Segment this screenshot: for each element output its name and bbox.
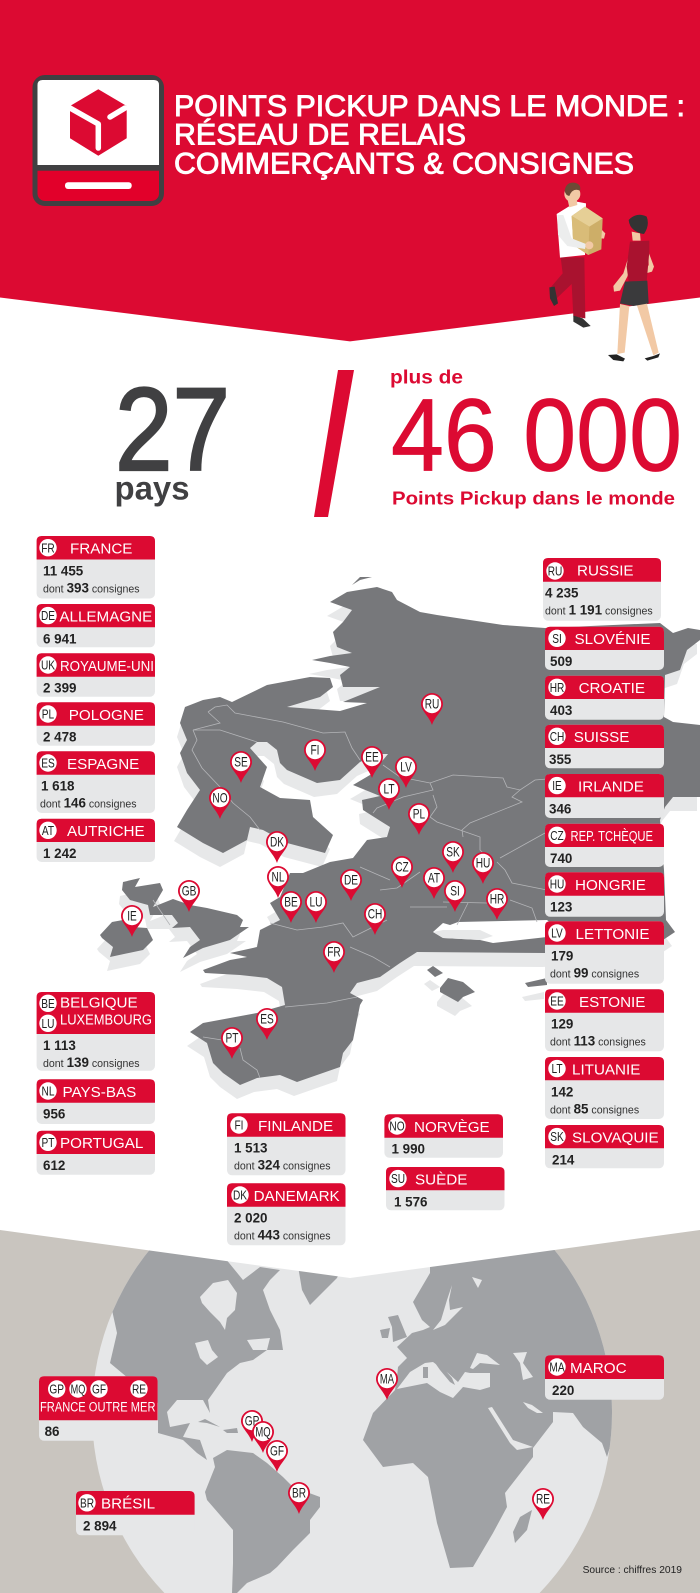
card: Portugal: PORTUGAL	[60, 1135, 143, 1152]
card: Allemagne	[37, 604, 155, 647]
card: Suisse	[545, 725, 664, 768]
card: France outre-mer: FRANCE OUTRE MER	[40, 1400, 156, 1415]
card: Finlande: FI	[234, 1118, 244, 1133]
land: North America	[110, 1250, 283, 1460]
card: Russie: dont 1 191 consignes	[545, 603, 653, 618]
card: Rép. Tchèque	[545, 824, 664, 867]
card: France: FR	[41, 541, 55, 556]
card: Lituanie: 142	[551, 1084, 573, 1099]
card: Royaume-Uni: 2 399	[43, 681, 77, 696]
card: Norvège: NO	[389, 1119, 405, 1134]
card: Norvège	[384, 1114, 503, 1158]
map pins: Europe: CH	[368, 906, 382, 922]
card: Espagne	[37, 751, 155, 813]
map pins: Europe: AT	[428, 870, 441, 886]
divider slash	[314, 370, 354, 517]
card: Finlande	[227, 1113, 346, 1175]
card: Russie: RU	[548, 564, 562, 579]
map pins: Europe: BE	[284, 894, 298, 910]
land: South America	[205, 1450, 320, 1593]
map pins: Europe: EE	[365, 749, 379, 765]
card: Russie	[543, 558, 661, 621]
map pins: Europe: RU	[425, 696, 439, 712]
card: Belgique Luxembourg: LU	[42, 1017, 54, 1031]
card: Pays-Bas: 956	[43, 1107, 65, 1122]
card: Russie: 4 235	[545, 586, 579, 601]
land: Madagascar	[513, 1510, 532, 1543]
card: Lituanie: LT	[551, 1062, 563, 1077]
map pins: Europe: LV	[400, 759, 412, 775]
card: Irlande: 346	[549, 801, 571, 816]
map pins: world: GF	[270, 1443, 284, 1459]
card: Rép. Tchèque: CZ	[550, 829, 564, 843]
card: Croatie: 403	[550, 703, 572, 718]
icon: DPD pickup locker logo	[35, 78, 162, 204]
stat: plus de 46 000 Points Pickup: plus de	[390, 368, 463, 389]
card: Lettonie: dont 99 consignes	[550, 966, 639, 981]
map pins: Europe: SE	[234, 754, 248, 770]
world section beige background	[0, 1225, 700, 1593]
map pins: Europe: NL	[272, 869, 285, 885]
card: Norvège: 1 990	[392, 1142, 425, 1157]
card: Slovénie	[545, 627, 664, 670]
map pins: Europe: PT	[226, 1030, 239, 1046]
title: POINTS PICKUP DANS LE MONDE :	[174, 90, 685, 123]
card: Lituanie	[545, 1057, 664, 1119]
card: Suède: 1 576	[394, 1194, 428, 1209]
card: Slovaquie	[545, 1125, 664, 1168]
map pins: Europe: DK	[270, 834, 284, 850]
card: Brésil: BRÉSIL	[101, 1496, 155, 1512]
card: Belgique Luxembourg: 1 113	[43, 1038, 76, 1053]
card: Finlande: FINLANDE	[258, 1118, 333, 1135]
card: Danemark: dont 443 consignes	[234, 1228, 331, 1243]
map pins: world: MA	[380, 1372, 394, 1387]
land: UK and Ireland	[380, 1315, 407, 1342]
red header band	[0, 0, 700, 341]
stat: plus de 46 000 Points Pickup: 46 000	[391, 378, 682, 493]
map pins: world: RE	[536, 1491, 550, 1507]
card: Rép. Tchèque: REP. TCHÈQUE	[570, 828, 653, 845]
card: France	[37, 536, 155, 598]
card: Pays-Bas: NL	[42, 1084, 55, 1099]
card: Pologne: PL	[42, 707, 55, 722]
map pins: Europe: IE	[127, 908, 137, 924]
card: Maroc: MA	[549, 1360, 565, 1375]
card: Suisse: CH	[550, 730, 564, 744]
card: France: FRANCE	[70, 540, 132, 558]
title	[174, 90, 685, 180]
card: Danemark: DK	[233, 1188, 247, 1203]
card: Portugal: PT	[42, 1136, 54, 1150]
card: Estonie: ESTONIE	[579, 994, 645, 1011]
map pins: Europe: CZ	[395, 859, 409, 875]
map pins: world: GP	[245, 1413, 259, 1429]
map pins: world: BR	[292, 1485, 306, 1501]
card: Autriche: 1 242	[43, 846, 77, 861]
card: Irlande: IE	[552, 779, 562, 794]
card: Allemagne: 6 941	[43, 631, 77, 646]
card: Allemagne: ALLEMAGNE	[59, 608, 152, 626]
map pins: Europe: FI	[310, 742, 320, 758]
map pins: Europe: LU	[310, 894, 322, 910]
map pins: Europe: HU	[476, 855, 490, 871]
land: Caribbean islands	[198, 1419, 238, 1433]
map pins: world: MQ	[255, 1425, 271, 1440]
card: France outre-mer: GF	[92, 1382, 106, 1397]
card: Danemark	[227, 1183, 346, 1245]
card: Royaume-Uni	[37, 653, 155, 697]
card: Estonie: 129	[551, 1017, 573, 1032]
map pins: Europe: SK	[446, 844, 460, 860]
map pins: Europe: PL	[413, 806, 425, 822]
man	[549, 183, 605, 328]
card: France: dont 393 consignes	[43, 580, 140, 596]
card: Hongrie	[545, 872, 664, 917]
card: Croatie: CROATIE	[579, 680, 645, 697]
inland seas	[195, 1277, 543, 1450]
card: Lettonie	[545, 921, 664, 984]
map pins: Europe	[121, 693, 508, 1059]
card: Pays-Bas	[37, 1079, 155, 1124]
card: Danemark: 2 020	[234, 1211, 268, 1226]
card: Espagne: dont 146 consignes	[40, 796, 137, 811]
world globe map	[94, 1250, 612, 1593]
card: Hongrie: 123	[550, 900, 572, 915]
card: Slovénie: SLOVÉNIE	[574, 631, 650, 648]
stat: 27 pays: pays	[114, 470, 190, 507]
card: Hongrie: HONGRIE	[575, 877, 646, 894]
card: Hongrie: HU	[550, 877, 564, 892]
card: Croatie: HR	[550, 681, 564, 695]
illustration: man carrying parcel and woman walking	[549, 183, 660, 361]
card: Finlande: 1 513	[234, 1141, 268, 1156]
card: Royaume-Uni: ROYAUME-UNI	[60, 658, 154, 675]
card: Lettonie: 179	[551, 949, 573, 964]
title: RÉSEAU DE RELAIS	[174, 119, 466, 152]
card: Espagne: ESPAGNE	[67, 756, 139, 773]
card: Lettonie: LETTONIE	[576, 926, 650, 943]
card: Suisse: SUISSE	[574, 729, 629, 746]
card: Portugal	[37, 1131, 155, 1175]
source note: Source : chiffres 2019	[583, 1564, 682, 1576]
card: Royaume-Uni: UK	[41, 658, 55, 673]
card: Slovénie: SI	[552, 632, 562, 646]
map pins: Europe: SI	[450, 883, 460, 899]
card: Autriche: AT	[42, 824, 54, 838]
card: Lituanie: dont 85 consignes	[550, 1101, 639, 1116]
card: Maroc: 220	[552, 1383, 574, 1398]
card: Belgique Luxembourg	[37, 992, 155, 1071]
card: Espagne: ES	[41, 756, 55, 771]
card: Autriche: AUTRICHE	[67, 823, 145, 840]
land: Eurasia and Africa	[363, 1250, 612, 1568]
card: Belgique Luxembourg: BE	[41, 997, 55, 1011]
map pins: Europe: HR	[490, 891, 505, 907]
card: Rép. Tchèque: 740	[550, 851, 572, 866]
card: France outre-mer: GP	[49, 1382, 64, 1397]
card: France outre-mer	[39, 1376, 158, 1441]
card: France outre-mer: RE	[132, 1382, 146, 1397]
stat: plus de 46 000 Points Pickup: Points Pickup dans le monde	[392, 488, 675, 509]
card: Brésil	[76, 1491, 195, 1535]
woman	[608, 215, 660, 361]
card: Pologne	[37, 702, 155, 746]
card: Russie: RUSSIE	[577, 562, 634, 580]
land: Italy and Mediterranean islands	[423, 1360, 455, 1385]
card: Suède	[386, 1167, 504, 1210]
card: Estonie: EE	[550, 994, 564, 1009]
card: Slovaquie: 214	[552, 1152, 575, 1167]
card: Lituanie: LITUANIE	[572, 1062, 640, 1078]
card: Belgique Luxembourg: LUXEMBOURG	[60, 1011, 152, 1028]
map pins: Europe: NO	[212, 790, 228, 806]
card: Espagne: 1 618	[41, 779, 75, 794]
card: France: 11 455	[43, 564, 84, 578]
map pins: Europe: FR	[327, 944, 341, 960]
map pins: Europe: ES	[260, 1011, 274, 1027]
card: Pays-Bas: PAYS-BAS	[62, 1084, 136, 1101]
card: Finlande: dont 324 consignes	[234, 1158, 331, 1173]
card: Danemark: DANEMARK	[254, 1188, 340, 1205]
card: Irlande	[545, 774, 664, 818]
card: Belgique Luxembourg: BELGIQUE	[60, 995, 138, 1012]
title: COMMERÇANTS & CONSIGNES	[174, 147, 634, 180]
card: Allemagne: DE	[41, 609, 55, 624]
card: Belgique Luxembourg: dont 139 consignes	[43, 1055, 140, 1070]
card: Norvège: NORVÈGE	[414, 1119, 490, 1136]
card: Suède: SUÈDE	[415, 1172, 467, 1188]
card: France outre-mer: 86	[45, 1424, 60, 1439]
card: Estonie	[545, 989, 664, 1051]
card: Slovaquie: SLOVAQUIE	[572, 1130, 659, 1146]
card: Pologne: POLOGNE	[69, 707, 144, 724]
map pins: Europe: GB	[182, 883, 196, 899]
card: Suisse: 355	[549, 752, 572, 767]
card: France outre-mer: MQ	[71, 1383, 86, 1397]
white section divider chevron	[0, 1000, 700, 1278]
card: Estonie: dont 113 consignes	[550, 1034, 646, 1049]
card: Croatie	[545, 676, 664, 720]
card: Irlande: IRLANDE	[578, 778, 644, 796]
card: Maroc	[545, 1355, 664, 1400]
map pins: world	[241, 1368, 554, 1520]
card: Maroc: MAROC	[570, 1360, 627, 1377]
card: Slovaquie: SK	[550, 1130, 564, 1145]
card: Suède: SU	[391, 1172, 405, 1187]
card: Brésil: 2 894	[83, 1519, 117, 1534]
card: Slovénie: 509	[550, 654, 572, 669]
map pins: Europe: DE	[344, 872, 358, 888]
card: Lettonie: LV	[551, 926, 563, 941]
stat: 27 pays: 27	[115, 364, 230, 496]
land: Greenland	[298, 1271, 338, 1305]
card: Brésil: BR	[80, 1496, 94, 1511]
card: Pologne: 2 478	[43, 730, 77, 745]
map pins: Europe: LT	[383, 781, 395, 797]
map of Europe	[97, 577, 700, 1099]
card: Portugal: 612	[43, 1158, 65, 1173]
card: Autriche	[37, 819, 155, 862]
